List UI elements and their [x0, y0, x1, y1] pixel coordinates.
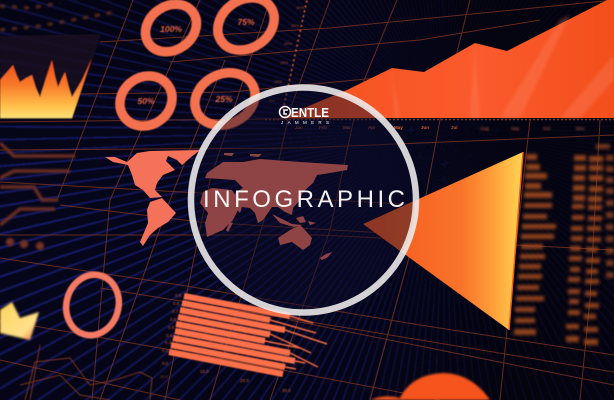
bar axis labels: 20.0	[240, 378, 249, 383]
logo mark	[280, 106, 290, 118]
Madagascar	[226, 222, 233, 232]
logo wordmark: ENTLE	[291, 106, 329, 120]
month axis: Aug	[480, 126, 489, 131]
logo tagline: JAMMERS	[281, 120, 329, 125]
month axis: Jul	[451, 125, 458, 130]
percent axis: 25%	[291, 23, 299, 28]
bar axis labels: 0.4	[166, 333, 173, 338]
New Zealand	[320, 252, 332, 260]
ring 75%	[208, 0, 284, 61]
flame area chart panel	[0, 34, 101, 120]
percent axis: 20%	[284, 41, 292, 46]
Indonesia	[272, 214, 316, 227]
panel backdrop	[0, 34, 101, 120]
ring 25%	[186, 63, 264, 135]
logo: Gentle Jammers	[280, 106, 329, 125]
left circuit lines	[0, 143, 75, 248]
month axis: Feb	[319, 125, 327, 130]
bar axis labels: 0.3	[165, 340, 172, 345]
Africa	[200, 188, 240, 237]
ring 75%: 75%	[237, 17, 255, 27]
percent axis: 5%	[269, 98, 275, 103]
central lens overlay	[191, 88, 416, 312]
month axis: Mar	[343, 125, 351, 130]
bars	[169, 296, 295, 374]
crown area chart	[0, 302, 39, 340]
percent axis: 10%	[274, 79, 282, 84]
North America	[105, 150, 200, 198]
month axis	[265, 120, 614, 131]
triangle bright rim	[509, 152, 523, 330]
month axis: Jan	[295, 125, 303, 130]
month axis: May	[394, 125, 403, 130]
blurred data table	[514, 144, 614, 345]
Eurasia	[205, 159, 348, 223]
percent axis: 15%	[280, 60, 288, 65]
bottom orange blobs	[370, 373, 490, 400]
ring 25%: 25%	[214, 94, 233, 104]
area chart highlight streaks	[392, 15, 614, 118]
world map	[105, 150, 348, 260]
bar axis labels: 0.8	[173, 301, 180, 306]
left ring	[59, 269, 126, 341]
month axis: Nov	[576, 126, 585, 131]
South America	[140, 198, 176, 246]
ring 50%	[110, 66, 182, 136]
percent axis: 30%	[296, 5, 304, 10]
funnel triangle	[363, 152, 523, 330]
lens tint	[192, 88, 416, 312]
month axis: Oct	[543, 126, 551, 131]
lens white ring	[191, 88, 416, 312]
bar axis labels: 0.7	[172, 309, 179, 314]
Australia	[278, 225, 312, 250]
bar axis labels: 0.6	[170, 317, 177, 322]
ring 100%: 100%	[160, 24, 182, 34]
bar axis labels: 0.2	[162, 348, 169, 353]
percent axis	[269, 0, 307, 110]
ring 100%	[136, 0, 206, 62]
bar axis labels	[162, 293, 291, 393]
title: INFOGRAPHIC	[203, 186, 405, 213]
bottom-left line chart: 20.0	[160, 374, 169, 379]
bar axis labels: 0.9	[175, 293, 182, 298]
ring 50%: 50%	[137, 96, 155, 106]
orange area chart	[280, 0, 614, 118]
Arctic islands	[224, 153, 262, 157]
bar axis labels: 0.5	[168, 325, 175, 330]
bar axis labels: 30.0	[282, 388, 291, 393]
month axis: Jun	[421, 125, 429, 130]
month axis: Sep	[511, 126, 520, 131]
bar axis labels: 0.0	[162, 361, 169, 366]
bar axis labels: 10.0	[200, 369, 209, 374]
bottom-left line chart	[20, 345, 169, 400]
thin bar extensions	[265, 316, 327, 369]
horizontal bar chart	[162, 293, 327, 393]
month axis: Apr	[368, 125, 376, 130]
flame area	[0, 58, 92, 118]
progress rings	[110, 0, 284, 136]
top-left faint line chart	[0, 3, 115, 30]
